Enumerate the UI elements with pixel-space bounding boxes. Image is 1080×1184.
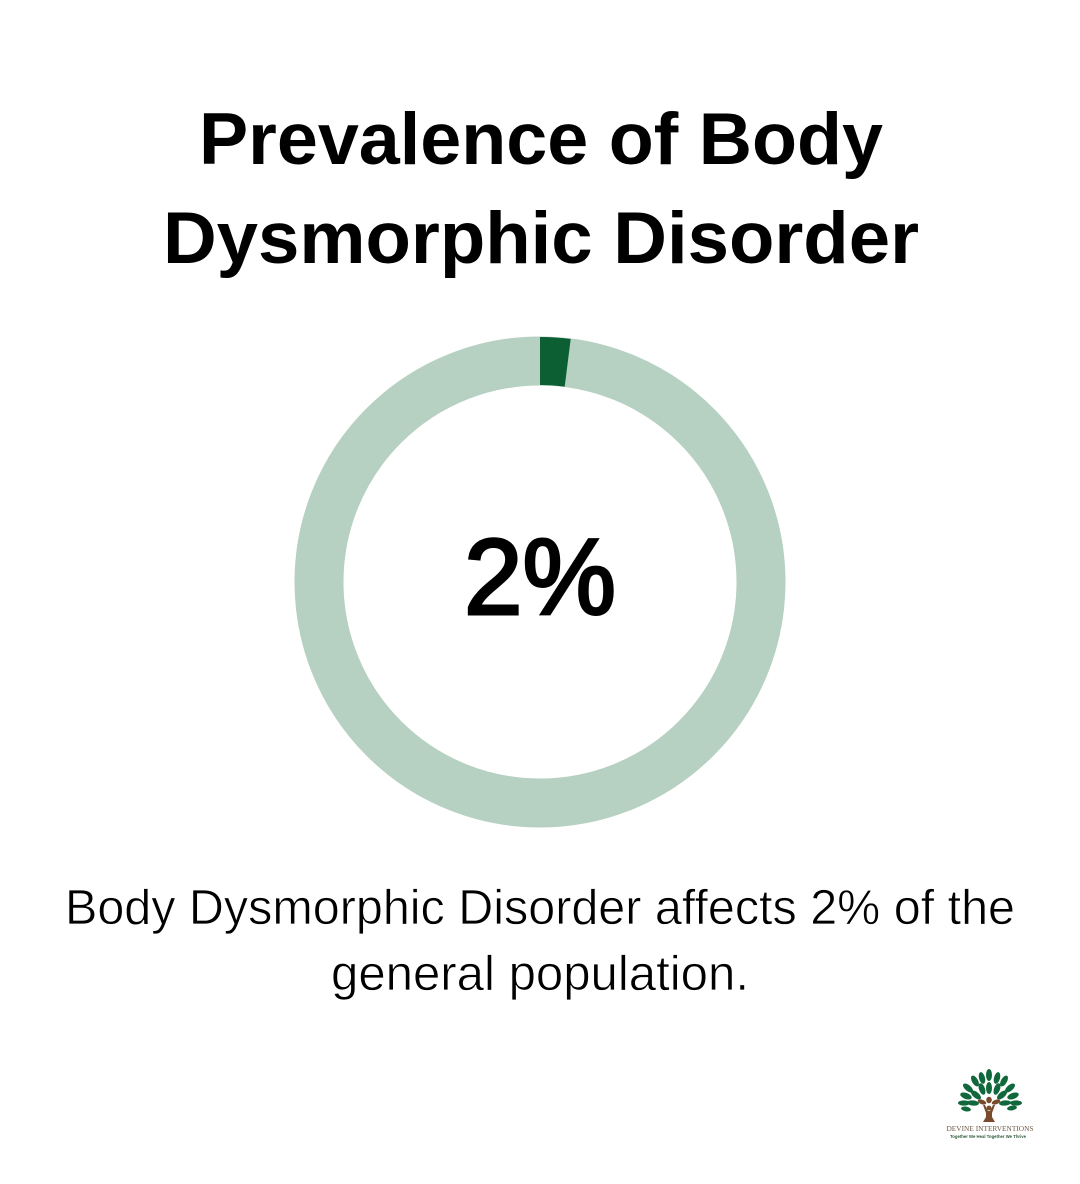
- title: Dysmorphic Disorder: [163, 198, 919, 279]
- title: Prevalence of Body: [199, 99, 883, 180]
- center value: 2%: [464, 516, 616, 637]
- icon: tree trunk figure: [977, 1097, 1001, 1122]
- description: general population.: [331, 947, 749, 1001]
- description: [65, 881, 1015, 1001]
- logo: [946, 1069, 1034, 1140]
- donut chart: [319, 337, 761, 803]
- donut segment: 2%: [540, 337, 571, 387]
- logo name: DEVINE INTERVENTIONS: [946, 1126, 1034, 1133]
- donut track: [319, 361, 761, 803]
- description: Body Dysmorphic Disorder affects 2% of the: [65, 881, 1015, 935]
- logo tagline: Together We Heal Together We Thrive: [950, 1134, 1026, 1140]
- icon: tree leaves: [958, 1069, 1022, 1112]
- title: [163, 99, 919, 279]
